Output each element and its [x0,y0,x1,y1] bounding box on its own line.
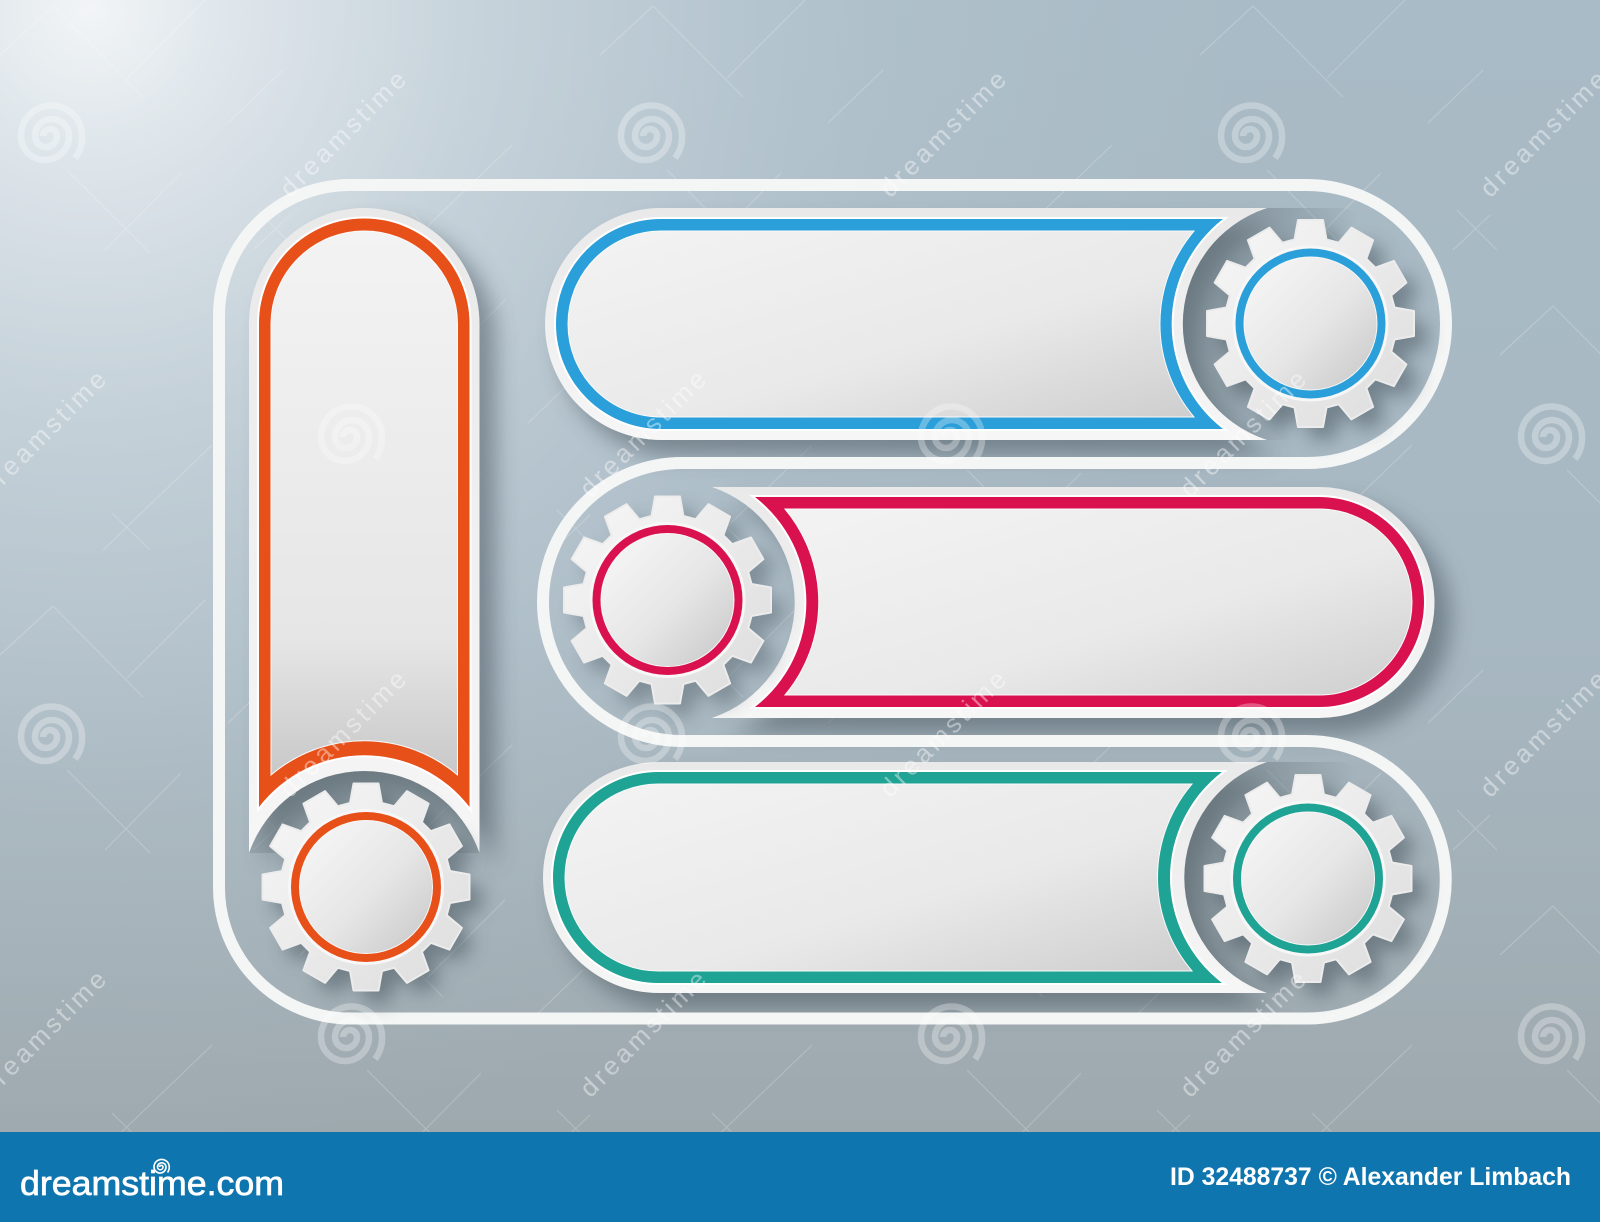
panel: blue horizontal [545,208,1267,440]
pink panel inner [785,509,1412,695]
blue panel band [556,219,1223,429]
blue panel inner [568,231,1194,417]
panel: pink horizontal [712,487,1434,718]
outer white outline frame [219,185,1446,1018]
watermark text: dreamstime [1173,964,1312,1103]
icon: teal gear [1204,775,1424,994]
icon: pink gear [564,496,784,716]
orange panel band [259,218,470,807]
pink panel band [755,497,1424,707]
blue panel rim [545,208,1267,440]
watermark text: dreamstime [873,64,1012,203]
teal panel band [553,772,1222,983]
watermark text: dreamstime [273,64,412,203]
icon: blue gear [1207,220,1426,440]
watermark text: dreamstime [1173,364,1312,503]
notch shadows behind the gears [249,208,1340,990]
icon: orange gear [262,784,482,1002]
footer logo text: dreamstime.com [20,1165,284,1203]
panel: teal horizontal [543,762,1267,993]
watermark text: dreamstime [273,664,412,803]
teal panel rim [543,762,1267,993]
footer credit: ID 32488737 © Alexander Limbach [1170,1163,1571,1191]
panel shadows [265,224,1450,1009]
panel: orange vertical [249,208,480,853]
watermark text: dreamstime [573,964,712,1103]
pink panel rim [712,487,1434,718]
footer logo spiral [154,1159,169,1173]
watermark spirals [21,106,1582,1061]
watermark text: dreamstime [573,364,712,503]
watermark text: dreamstime [873,664,1012,803]
teal panel inner [565,784,1192,971]
orange panel inner [271,231,458,775]
footer bar [0,1132,1600,1222]
orange panel rim [249,208,480,853]
